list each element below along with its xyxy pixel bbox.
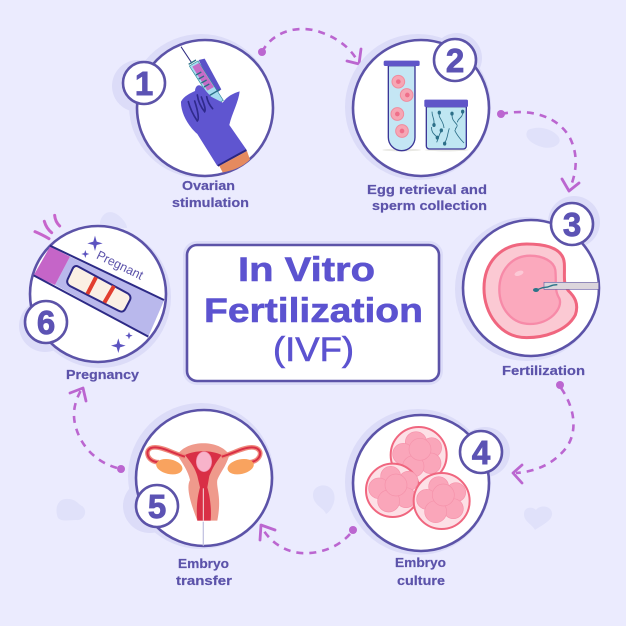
title panel	[183, 241, 443, 385]
illustration: oocyte injection	[484, 244, 599, 338]
label 5: Embryo	[178, 556, 229, 571]
badge 4	[460, 431, 502, 473]
halo 1	[112, 34, 273, 178]
arrow 3 to 4	[513, 381, 573, 483]
title text	[204, 251, 423, 369]
circle 6	[30, 226, 166, 362]
badge 3	[551, 203, 593, 245]
halo 4	[345, 409, 510, 555]
badge 2	[434, 39, 476, 81]
label 1: stimulation	[172, 195, 249, 210]
halo 5	[123, 403, 274, 549]
halo 3	[455, 196, 600, 361]
badge 1	[123, 62, 165, 104]
arrow 4 to 5	[260, 525, 357, 553]
circle 3	[463, 220, 599, 356]
label 4: culture	[397, 573, 445, 588]
illustration: gloved hand with syringe	[181, 47, 250, 172]
circle 5	[136, 410, 272, 546]
numeral 5: 5	[148, 488, 166, 525]
circle 1	[137, 40, 273, 176]
label 2: sperm collection	[372, 198, 487, 213]
label 1: Ovarian	[182, 178, 235, 193]
label 1	[172, 178, 249, 210]
illustration: pregnancy test: Pregnant	[94, 248, 146, 283]
label 4	[395, 555, 446, 588]
step 3: fertilization	[455, 196, 600, 378]
step 6: pregnancy	[19, 215, 171, 382]
illustration: uterus	[147, 443, 260, 546]
step 2: egg retrieval and sperm collection	[345, 33, 491, 213]
arrow 5 to 6	[70, 388, 125, 473]
arrow 1 to 2	[258, 29, 361, 64]
label 3: Fertilization	[502, 363, 585, 378]
badge 5	[136, 485, 178, 527]
label 5: transfer	[176, 573, 232, 588]
label 2	[367, 182, 487, 213]
label 2: Egg retrieval and	[367, 182, 487, 197]
label 5	[176, 556, 232, 588]
numeral 1: 1	[135, 65, 153, 102]
background blobs	[56, 128, 560, 530]
circle 4	[353, 415, 489, 551]
numeral 3: 3	[563, 206, 581, 243]
illustration: pregnancy test	[34, 215, 164, 353]
numeral 4: 4	[472, 434, 491, 471]
badge 6	[25, 301, 67, 343]
circle 2	[353, 40, 489, 176]
numeral 6: 6	[37, 304, 55, 341]
illustration: embryos	[366, 427, 470, 529]
title text: (IVF)	[273, 331, 354, 369]
step 5: embryo transfer	[123, 403, 274, 588]
halo 6	[19, 226, 171, 368]
title text: In Vitro	[238, 251, 375, 289]
halo 2	[345, 33, 491, 180]
label 6: Pregnancy	[66, 367, 140, 382]
numeral 2: 2	[446, 42, 464, 79]
step 4: embryo culture	[345, 409, 510, 588]
arrow 2 to 3	[497, 110, 579, 191]
step 1: ovarian stimulation	[112, 34, 273, 210]
label 4: Embryo	[395, 555, 446, 570]
illustration: test tube and jar	[382, 61, 469, 151]
title text: Fertilization	[204, 292, 423, 330]
